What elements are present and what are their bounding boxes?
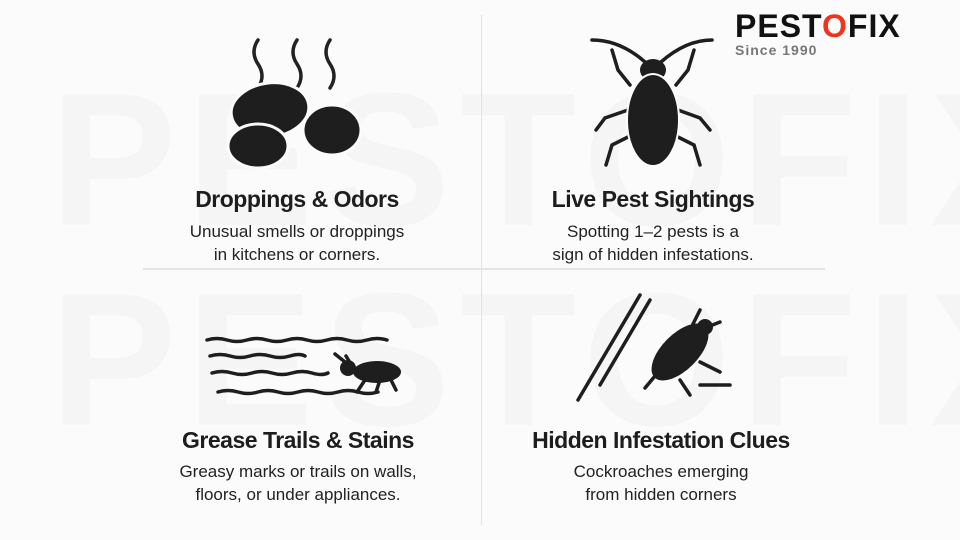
- logo: Since 1990: [735, 42, 817, 58]
- text: grease: [179, 462, 417, 504]
- heading: hidden: Hidden Infestation Clues: [532, 427, 790, 453]
- icon: droppings and odors: [230, 38, 360, 166]
- text: live pest: sign of hidden infestations.: [552, 245, 754, 264]
- icon: grease trails: [205, 336, 401, 396]
- dividers: [481, 15, 482, 525]
- logo: PESTOFIX: [735, 8, 901, 44]
- text: droppings: [190, 222, 404, 264]
- text: hidden: [574, 462, 748, 504]
- icon: hidden cockroach: [576, 293, 732, 402]
- text: grease: floors, or under appliances.: [195, 485, 401, 504]
- watermark: [50, 60, 950, 510]
- text: grease: Greasy marks or trails on walls,: [179, 462, 417, 481]
- heading: grease: Grease Trails & Stains: [182, 427, 414, 453]
- heading: droppings: Droppings & Odors: [195, 186, 399, 212]
- text: live pest: Spotting 1–2 pests is a: [567, 222, 739, 241]
- text: droppings: Unusual smells or droppings: [190, 222, 404, 241]
- icon: cockroach: [590, 38, 714, 167]
- text: hidden: Cockroaches emerging: [574, 462, 748, 481]
- text: hidden: from hidden corners: [585, 485, 737, 504]
- text: droppings: in kitchens or corners.: [214, 245, 380, 264]
- text: live pest: [552, 222, 754, 264]
- heading: live pest: Live Pest Sightings: [552, 186, 754, 212]
